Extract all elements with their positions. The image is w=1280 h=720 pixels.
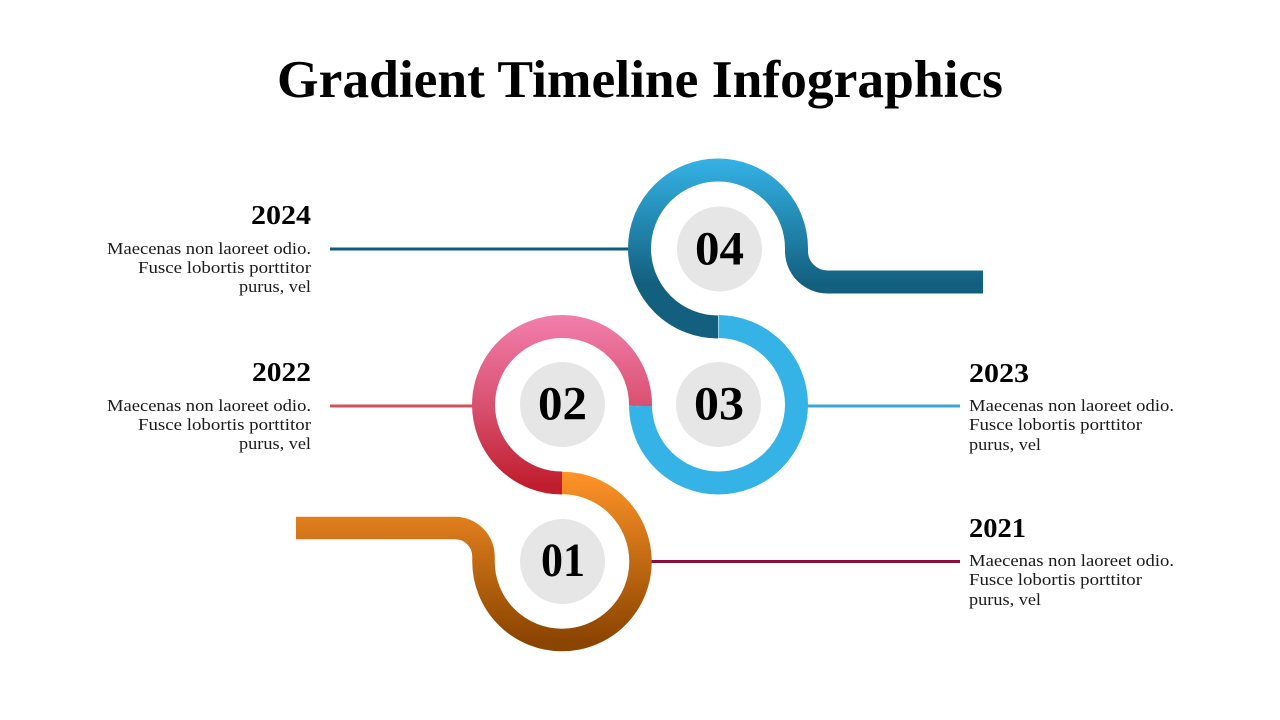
step badge 03	[676, 362, 761, 447]
step badge 03: 03	[694, 378, 744, 430]
connector line: 2021	[651, 560, 960, 563]
text block: 2024	[107, 200, 312, 296]
step badge 01	[520, 519, 605, 604]
text block: 2023: 2023	[969, 358, 1029, 388]
text block: 2024: 2024	[251, 200, 311, 230]
ribbon segment 01	[296, 483, 640, 640]
connector line: 2022	[330, 404, 473, 408]
text block: 2024: Maecenas non laoreet odio.	[107, 239, 311, 258]
text block: 2022: Maecenas non laoreet odio.	[107, 396, 311, 415]
text block: 2022	[107, 357, 312, 453]
ribbon segment 02	[484, 326, 641, 483]
text block: 2021: 2021	[969, 513, 1026, 543]
text block: 2022: Fusce lobortis porttitor	[138, 415, 312, 434]
step badge 02: 02	[538, 378, 587, 430]
ribbon segment 03	[640, 326, 796, 483]
text block: 2021	[969, 513, 1174, 609]
text block: 2023: Maecenas non laoreet odio.	[969, 396, 1174, 415]
step badge 04: 04	[695, 222, 744, 276]
text block: 2024: purus, vel	[239, 277, 311, 296]
text block: 2023	[969, 358, 1174, 454]
text block: 2021: Fusce lobortis porttitor	[969, 570, 1143, 589]
connector line: 2024	[330, 248, 629, 250]
step badge 04	[677, 206, 762, 292]
text block: 2024: Fusce lobortis porttitor	[138, 258, 312, 277]
text block: 2023: purus, vel	[969, 435, 1041, 454]
text block: 2022: purus, vel	[239, 434, 311, 453]
text block: 2023: Fusce lobortis porttitor	[969, 415, 1143, 434]
connector line: 2023	[807, 404, 960, 408]
ribbon segment 04	[640, 170, 983, 327]
title: Gradient Timeline Infographics	[277, 51, 1003, 109]
step badge 02	[520, 362, 605, 447]
text block: 2022: 2022	[252, 357, 311, 387]
step badge 01: 01	[541, 534, 585, 587]
text block: 2021: Maecenas non laoreet odio.	[969, 551, 1174, 570]
text block: 2021: purus, vel	[969, 590, 1041, 609]
